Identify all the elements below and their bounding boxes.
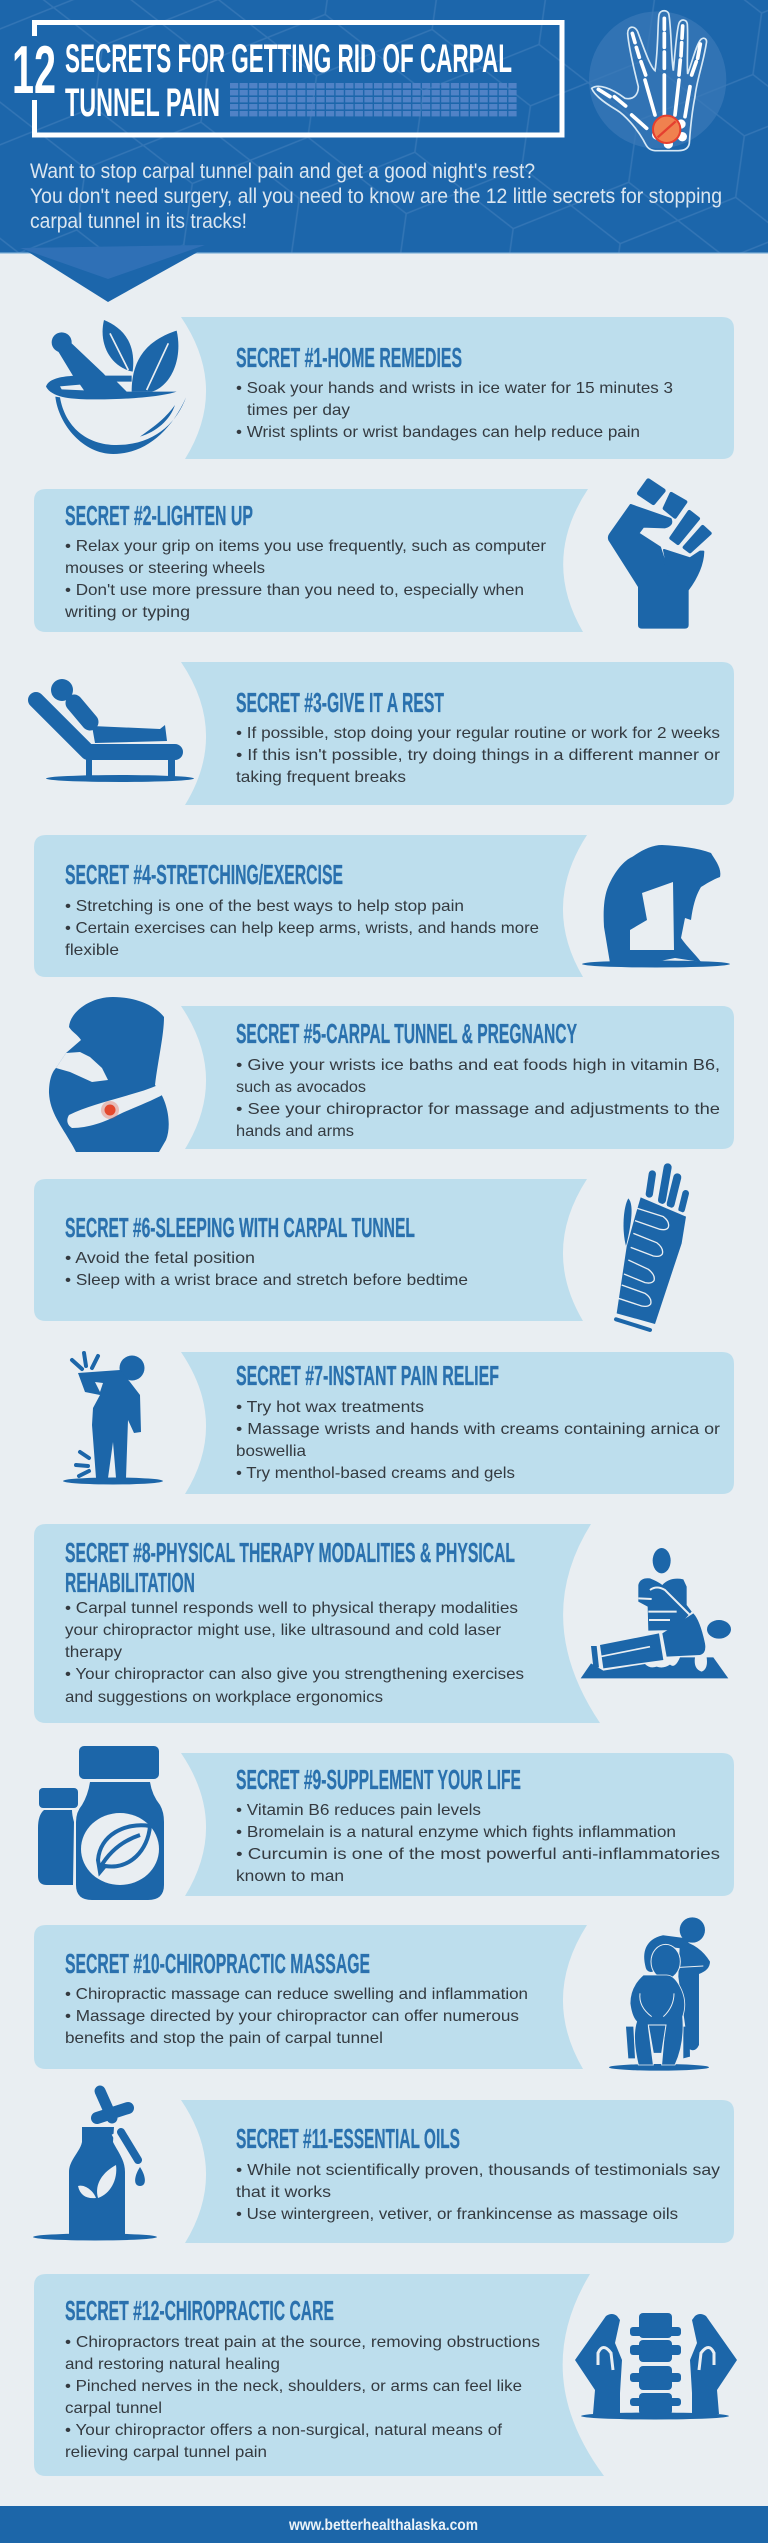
text: secret 4 bullets: • Certain exercises can help keep arms, wrists, and hands more [65, 920, 539, 937]
text: secret 12 bullets: and restoring natural healing [65, 2356, 280, 2373]
intro text [30, 160, 722, 233]
heading: secret 2: SECRET #2-LIGHTEN UP [65, 500, 253, 531]
panel: secret 11 [181, 2100, 734, 2243]
panel: secret 12 [34, 2274, 604, 2476]
text: secret 9 bullets: known to man [236, 1868, 344, 1885]
text: secret 3 bullets: • If this isn't possible, try doing things in a different manner or [236, 747, 721, 764]
icon: backbend stretch [582, 845, 730, 968]
intro text: carpal tunnel in its tracks! [30, 210, 247, 233]
text: secret 6 bullets: • Avoid the fetal position [65, 1250, 255, 1267]
heading: secret 8: REHABILITATION [65, 1567, 195, 1598]
panel: secret 5 [181, 1006, 734, 1149]
text: secret 7 bullets: • Try menthol-based creams and gels [236, 1465, 515, 1482]
panel: secret 9 [181, 1753, 734, 1896]
title number: 12 [12, 32, 56, 108]
text: secret 5 bullets: such as avocados [236, 1079, 366, 1096]
panel: secret 3 [181, 662, 734, 805]
text: secret 8 bullets [65, 1600, 524, 1706]
text: secret 8 bullets: therapy [65, 1644, 122, 1661]
text: secret 9 bullets: • Vitamin B6 reduces pain levels [236, 1802, 481, 1819]
icon: hand x-ray [589, 11, 726, 151]
text: secret 2 bullets: • Relax your grip on items you use frequently, such as computer [65, 538, 547, 555]
panel: secret 4 [34, 835, 587, 977]
icon: seated massage [609, 1917, 710, 2071]
text: secret 12 bullets: • Your chiropractor offers a non-surgical, natural means of [65, 2422, 503, 2439]
text: secret 12 bullets: • Pinched nerves in the neck, shoulders, or arms can feel like [65, 2378, 522, 2395]
text: secret 2 bullets [64, 538, 547, 621]
text: secret 6 bullets: • Sleep with a wrist brace and stretch before bedtime [65, 1272, 468, 1289]
panel: secret 2 [34, 489, 588, 632]
panel: secret 6 [34, 1179, 587, 1321]
heading: secret 1: SECRET #1-HOME REMEDIES [236, 342, 462, 373]
text: secret 9 bullets [236, 1802, 720, 1885]
text: secret 11 bullets: that it works [236, 2184, 331, 2201]
text: secret 3 bullets: • If possible, stop doing your regular routine or work for 2 weeks [236, 725, 720, 742]
text: secret 8 bullets: • Carpal tunnel responds well to physical therapy modalities [65, 1600, 518, 1617]
icon: man with back pain [63, 1353, 163, 1484]
text: secret 9 bullets: • Curcumin is one of the most powerful anti-inflammatories [236, 1846, 720, 1863]
text: secret 9 bullets: • Bromelain is a natural enzyme which fights inflammation [236, 1824, 676, 1841]
icon: spine in hands [575, 2313, 737, 2420]
footer url: www.betterhealthalaska.com [288, 2517, 478, 2534]
icon: essential oil bottle [33, 2091, 157, 2240]
title text [65, 37, 512, 125]
text: secret 6 bullets [65, 1250, 468, 1289]
header banner [0, 0, 768, 254]
panel: secret 7 [181, 1352, 734, 1494]
text: secret 1 bullets: times per day [247, 402, 350, 419]
title frame [34, 22, 562, 135]
text: secret 11 bullets: • While not scientifically proven, thousands of testimonials say [236, 2162, 720, 2179]
text: secret 10 bullets [65, 1986, 528, 2047]
panel: secret 10 [34, 1925, 587, 2069]
icon: physical therapy [581, 1548, 731, 1678]
text: secret 1 bullets: • Soak your hands and wrists in ice water for 15 minutes 3 [236, 380, 673, 397]
icon: person on lounger [36, 679, 194, 782]
text: secret 2 bullets: mouses or steering wheels [65, 560, 265, 577]
text: secret 10 bullets: • Massage directed by your chiropractor can offer numerous [65, 2008, 519, 2025]
heading: secret 10: SECRET #10-CHIROPRACTIC MASSAGE [65, 1948, 370, 1979]
icon: pregnant woman with wrist pain [49, 997, 169, 1152]
heading: secret 8 [65, 1537, 515, 1598]
text: secret 7 bullets [236, 1399, 721, 1482]
text: secret 3 bullets: taking frequent breaks [236, 769, 406, 786]
text: secret 11 bullets [236, 2162, 720, 2223]
text: secret 12 bullets [65, 2334, 540, 2461]
heading: secret 7: SECRET #7-INSTANT PAIN RELIEF [236, 1360, 499, 1391]
icon: wrist brace [616, 1167, 687, 1330]
text: secret 12 bullets: • Chiropractors treat pain at the source, removing obstructions [65, 2334, 540, 2351]
text: secret 1 bullets [236, 380, 673, 441]
panel: secret 8 [34, 1524, 600, 1723]
text: secret 2 bullets: • Don't use more pressure than you need to, especially when [65, 582, 524, 599]
text: secret 7 bullets: • Massage wrists and hands with creams containing arnica or [236, 1421, 721, 1438]
text: secret 12 bullets: carpal tunnel [65, 2400, 162, 2417]
text: secret 10 bullets: • Chiropractic massage can reduce swelling and inflammation [65, 1986, 528, 2003]
text: secret 11 bullets: • Use wintergreen, vetiver, or frankincense as massage oils [236, 2206, 678, 2223]
intro text: You don't need surgery, all you need to know are the 12 little secrets for stopping [30, 185, 722, 208]
text: secret 5 bullets [236, 1057, 720, 1140]
text: secret 5 bullets: hands and arms [236, 1123, 354, 1140]
text: secret 1 bullets: • Wrist splints or wrist bandages can help reduce pain [236, 424, 640, 441]
text: secret 8 bullets: • Your chiropractor can also give you strengthening exercises [65, 1666, 524, 1683]
text: secret 4 bullets: flexible [65, 942, 119, 959]
header chevron [20, 245, 205, 302]
text: secret 8 bullets: your chiropractor might use, like ultrasound and cold laser [65, 1622, 502, 1639]
text: secret 3 bullets [236, 725, 721, 786]
text: secret 12 bullets: relieving carpal tunnel pain [65, 2444, 267, 2461]
intro text: Want to stop carpal tunnel pain and get a good night's rest? [30, 160, 535, 183]
title dot grid [230, 83, 517, 117]
heading: secret 11: SECRET #11-ESSENTIAL OILS [236, 2123, 460, 2154]
icon: supplement bottles [38, 1746, 164, 1900]
text: secret 7 bullets: boswellia [236, 1443, 306, 1460]
text: secret 2 bullets: writing or typing [64, 604, 190, 621]
heading: secret 12: SECRET #12-CHIROPRACTIC CARE [65, 2295, 334, 2326]
text: secret 4 bullets [65, 898, 539, 959]
panel: secret 1 [181, 317, 734, 459]
text: secret 5 bullets: • See your chiropractor for massage and adjustments to the [236, 1101, 720, 1118]
heading: secret 3: SECRET #3-GIVE IT A REST [236, 687, 444, 718]
icon: raised fist [609, 481, 710, 628]
heading: secret 4: SECRET #4-STRETCHING/EXERCISE [65, 859, 343, 890]
text: secret 8 bullets: and suggestions on workplace ergonomics [65, 1689, 383, 1706]
icon: mortar and pestle [46, 320, 186, 454]
footer bar [0, 2506, 768, 2543]
heading: secret 6: SECRET #6-SLEEPING WITH CARPAL TUNNEL [65, 1212, 415, 1243]
text: secret 5 bullets: • Give your wrists ice baths and eat foods high in vitamin B6, [236, 1057, 720, 1074]
text: secret 10 bullets: benefits and stop the pain of carpal tunnel [65, 2030, 383, 2047]
title text: TUNNEL PAIN [65, 81, 220, 125]
heading: secret 9: SECRET #9-SUPPLEMENT YOUR LIFE [236, 1764, 521, 1795]
text: secret 4 bullets: • Stretching is one of the best ways to help stop pain [65, 898, 464, 915]
text: secret 7 bullets: • Try hot wax treatments [236, 1399, 424, 1416]
